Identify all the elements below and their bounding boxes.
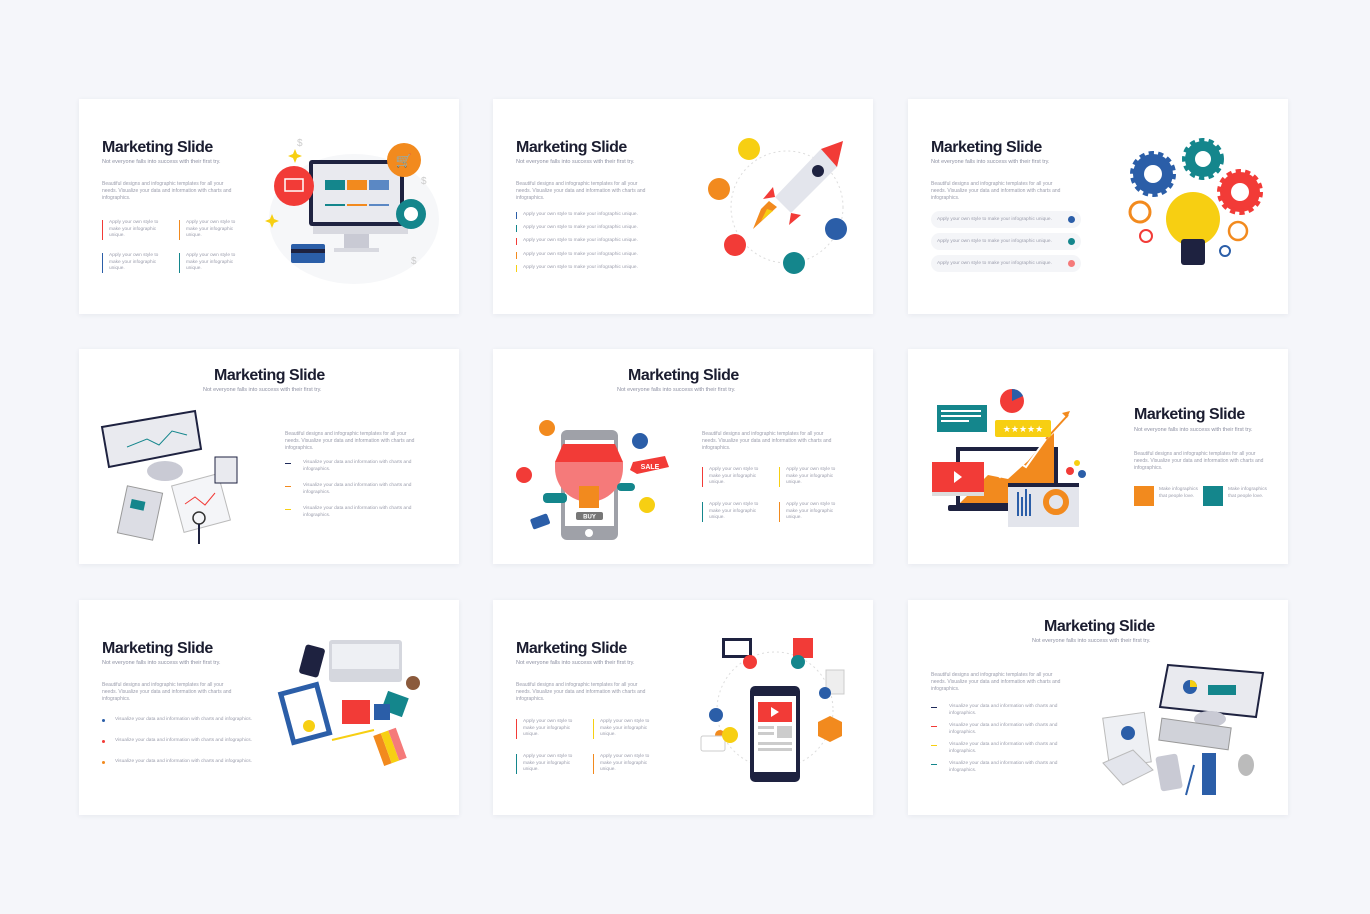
bullets: Visualize your data and information with charts and infographics. (949, 742, 1057, 754)
slide 9: computer desk (908, 600, 1288, 815)
illustration: phone store: SALE (641, 464, 660, 471)
bullets: Visualize your data and information with charts and infographics. (949, 761, 1057, 772)
bullets (102, 220, 236, 273)
list: Apply your own style to make your infographic unique. (523, 252, 638, 257)
bullets (516, 718, 650, 774)
bullets: Visualize your data and information with charts and infographics. (949, 704, 1057, 716)
illustration: desk (100, 410, 238, 544)
bullets: Apply your own style to make your infographic unique. (523, 754, 572, 772)
pills: Apply your own style to make your infographic unique. (937, 261, 1052, 266)
pills: Apply your own style to make your infographic unique. (937, 217, 1052, 222)
pills: Apply your own style to make your infographic unique. (937, 239, 1052, 244)
subtitle: Not everyone falls into success with their first try. (102, 159, 220, 165)
bullets: Apply your own style to make your infographic unique. (109, 253, 158, 271)
bullets (931, 704, 1058, 772)
pills (931, 211, 1081, 272)
list: Apply your own style to make your infographic unique. (523, 238, 638, 243)
slide 3: gears (908, 99, 1288, 314)
slide 8: phone ecosystem (493, 600, 873, 815)
subtitle: Not everyone falls into success with their first try. (617, 387, 736, 393)
dot bullets (102, 716, 252, 764)
subtitle: Not everyone falls into success with their first try. (1134, 427, 1252, 433)
paragraph: Beautiful designs and infographic templates for all your needs. Visualize your data and information with charts and infographics. (702, 431, 831, 451)
title: Marketing Slide (1044, 618, 1155, 635)
illustration: computer desk (1102, 664, 1264, 796)
illustration: workspace (278, 640, 420, 766)
bullets: Apply your own style to make your infographic unique. (709, 502, 758, 520)
bullets: Apply your own style to make your infographic unique. (709, 467, 758, 485)
illustration: phone store: BUY (583, 514, 596, 520)
bullets: Apply your own style to make your infographic unique. (186, 220, 235, 238)
subtitle: Not everyone falls into success with their first try. (203, 387, 322, 393)
bullets: Visualize your data and information with charts and infographics. (949, 723, 1057, 734)
list: Apply your own style to make your infographic unique. (523, 225, 638, 230)
title: Marketing Slide (1134, 406, 1245, 423)
icon items: Make infographics that people love. (1159, 487, 1198, 499)
bullets: Apply your own style to make your infographic unique. (786, 467, 835, 485)
dot bullets: Visualize your data and information with charts and infographics. (115, 759, 252, 764)
paragraph: Beautiful designs and infographic templates for all your needs. Visualize your data and information with charts and infographics. (102, 181, 231, 201)
title: Marketing Slide (931, 139, 1042, 156)
dot bullets: Visualize your data and information with charts and infographics. (115, 717, 252, 722)
paragraph: Beautiful designs and infographic templates for all your needs. Visualize your data and information with charts and infographics. (516, 682, 645, 702)
illustration: monitor: $ (297, 138, 303, 149)
bullets: Apply your own style to make your infographic unique. (186, 253, 235, 271)
paragraph: Beautiful designs and infographic templates for all your needs. Visualize your data and information with charts and infographics. (931, 672, 1060, 692)
illustration: gears and bulb (1128, 138, 1263, 265)
bullets: Apply your own style to make your infographic unique. (109, 220, 158, 238)
title: Marketing Slide (102, 139, 213, 156)
illustration: monitor: $ (421, 176, 427, 187)
slide 5: mobile store (493, 349, 873, 564)
subtitle: Not everyone falls into success with their first try. (102, 660, 220, 666)
bullets: Apply your own style to make your infographic unique. (600, 719, 649, 737)
bullets (285, 460, 412, 518)
bullets (702, 466, 836, 522)
subtitle: Not everyone falls into success with their first try. (1032, 638, 1150, 644)
slide 6: analytics laptop (908, 349, 1288, 564)
bullets: Apply your own style to make your infographic unique. (523, 719, 572, 737)
list: Apply your own style to make your infographic unique. (523, 212, 638, 217)
paragraph: Beautiful designs and infographic templates for all your needs. Visualize your data and information with charts and infographics. (285, 431, 414, 451)
title: Marketing Slide (516, 139, 627, 156)
bullets: Apply your own style to make your infographic unique. (600, 754, 649, 772)
illustration: monitor (265, 138, 439, 284)
illustration: monitor: $ (411, 256, 417, 267)
list (516, 212, 638, 272)
illustration: rocket (708, 138, 847, 274)
paragraph: Beautiful designs and infographic templates for all your needs. Visualize your data and information with charts and infographics. (1134, 451, 1263, 471)
subtitle: Not everyone falls into success with their first try. (931, 159, 1050, 165)
paragraph: Beautiful designs and infographic templates for all your needs. Visualize your data and information with charts and infographics. (516, 181, 645, 201)
icon items (1134, 486, 1267, 506)
slide 2: rocket (493, 99, 873, 314)
list: Apply your own style to make your infographic unique. (523, 265, 638, 270)
title: Marketing Slide (214, 367, 325, 384)
slide 7: workspace (79, 600, 459, 815)
bullets: Apply your own style to make your infographic unique. (786, 502, 835, 520)
bullets: Visualize your data and information with charts and infographics. (303, 460, 411, 472)
slide 1: monitor (79, 99, 459, 314)
title: Marketing Slide (516, 640, 627, 657)
icon items: Make infographics that people love. (1228, 487, 1267, 499)
subtitle: Not everyone falls into success with their first try. (516, 660, 634, 666)
paragraph: Beautiful designs and infographic templates for all your needs. Visualize your data and information with charts and infographics. (102, 682, 231, 702)
illustration: phone with icons (700, 638, 844, 782)
illustration: laptop growth: ★★★★★ (1003, 424, 1043, 434)
title: Marketing Slide (102, 640, 213, 657)
title: Marketing Slide (628, 367, 739, 384)
illustration: laptop growth (932, 389, 1086, 527)
illustration: phone store (516, 420, 669, 540)
paragraph: Beautiful designs and infographic templates for all your needs. Visualize your data and information with charts and infographics. (931, 181, 1060, 201)
dot bullets: Visualize your data and information with charts and infographics. (115, 738, 252, 743)
subtitle: Not everyone falls into success with their first try. (516, 159, 634, 165)
illustration: monitor: 🛒 (396, 153, 412, 168)
bullets: Visualize your data and information with charts and infographics. (303, 506, 411, 518)
bullets: Visualize your data and information with charts and infographics. (303, 483, 411, 494)
slide 4: desk analytics (79, 349, 459, 564)
